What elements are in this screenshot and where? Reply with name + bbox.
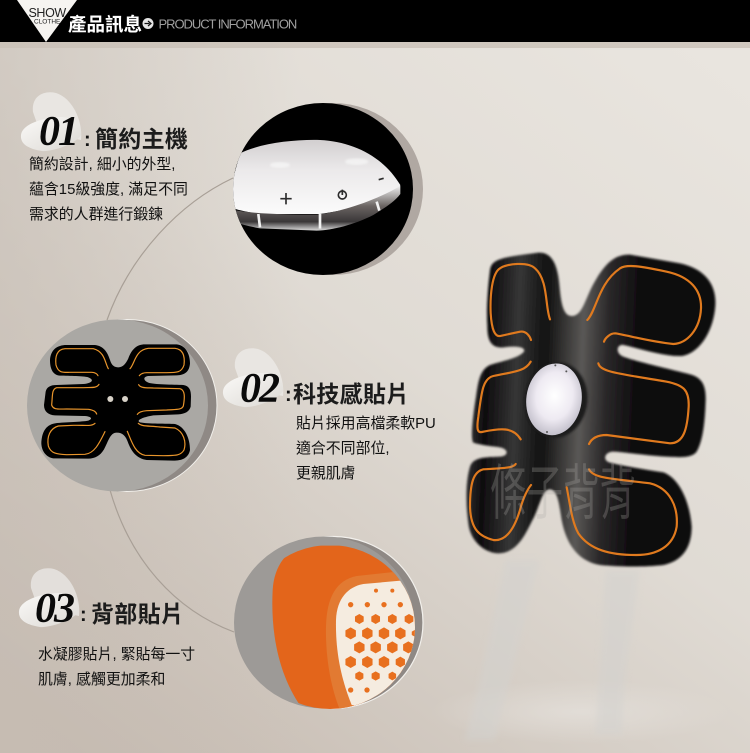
section 02 (223, 348, 436, 482)
description 03: 肌膚, 感觸更加柔和 (38, 670, 165, 688)
header subtitle: PRODUCT INFORMATION (158, 16, 297, 32)
heading 02: 科技感貼片 (293, 381, 410, 407)
orange patch (272, 546, 415, 709)
circle: back patch photo (234, 536, 427, 717)
icon: arrow circle (142, 18, 154, 29)
number 01: 01 (39, 109, 77, 155)
heading 03: 背部貼片 (91, 601, 184, 627)
circle: main unit photo (230, 103, 423, 275)
description 03: 水凝膠貼片, 緊貼每一寸 (38, 646, 195, 663)
number 03: 03 (35, 586, 74, 632)
header bar (0, 0, 750, 42)
brand triangle logo: CLOTHE (34, 18, 61, 26)
hexagon dots (345, 589, 418, 693)
section 01 (21, 92, 188, 223)
description 02: 更親肌膚 (296, 465, 356, 482)
brand triangle logo (17, 0, 77, 42)
orange electrode lines (470, 264, 701, 555)
description 03 (38, 646, 195, 688)
small abdominal patch (41, 344, 191, 461)
brand triangle logo: SHOW (28, 6, 66, 20)
centre button (520, 358, 592, 442)
heading 03: : (80, 604, 87, 626)
badge petal 03 (19, 568, 79, 627)
chrome band (230, 186, 400, 231)
large product: abdominal patch (466, 253, 715, 567)
badge petal 01 (21, 92, 81, 151)
circle: patch overview (27, 320, 217, 492)
heading 01: : (84, 129, 91, 151)
description 02: 貼片採用高檔柔軟PU (296, 415, 436, 432)
description 01 (29, 155, 188, 223)
button symbols (280, 178, 384, 204)
badge petal 02 (223, 348, 283, 407)
connecting curves (107, 178, 234, 632)
section 03 (19, 568, 195, 688)
header title: 產品訊息 (68, 14, 142, 35)
description 02: 適合不同部位, (296, 439, 389, 457)
heading 02: : (285, 384, 292, 406)
watermark: 條子背背 (490, 460, 636, 527)
heading 01: 簡約主機 (95, 126, 188, 152)
description 01: 簡約設計, 細小的外型, (29, 155, 175, 173)
description 02 (296, 415, 436, 482)
number 02: 02 (240, 366, 280, 412)
device body (230, 140, 400, 214)
description 01: 需求的人群進行鍛鍊 (29, 206, 163, 223)
description 01: 蘊含15級強度, 滿足不同 (29, 181, 188, 198)
